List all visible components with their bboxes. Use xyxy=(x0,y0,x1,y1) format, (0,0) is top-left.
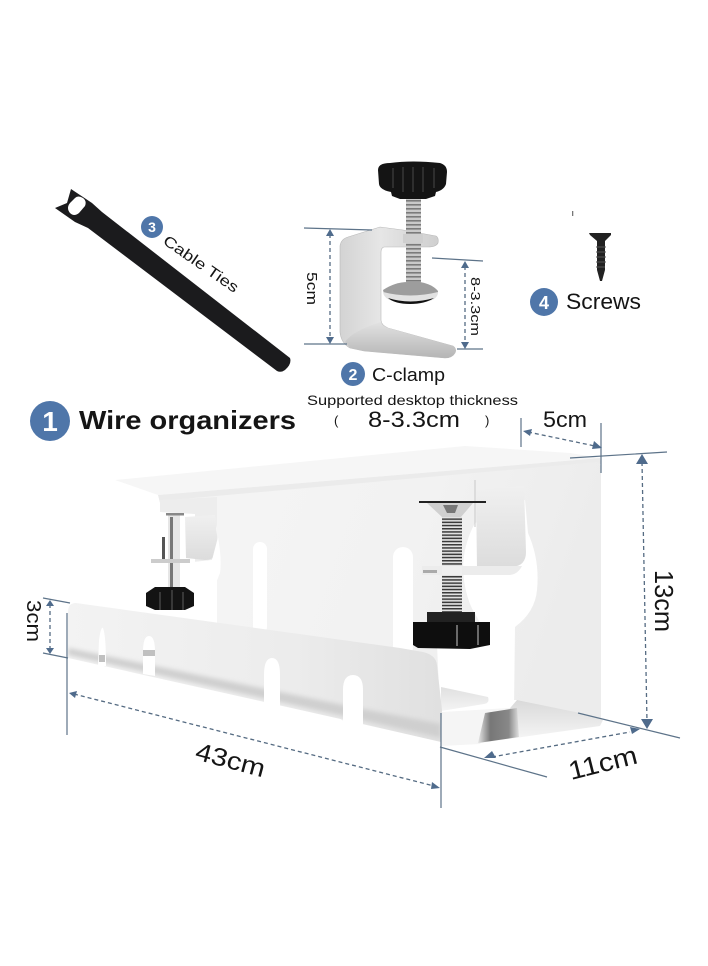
left clamp screw xyxy=(151,513,190,587)
main wire organizer xyxy=(68,446,603,746)
supported thickness text xyxy=(307,392,518,432)
badge 2 and C-clamp label: 2 xyxy=(349,367,358,384)
left black knob xyxy=(146,587,194,610)
dimension: 11cm depth xyxy=(440,727,640,786)
tick mark xyxy=(572,211,573,216)
bottom tray floor xyxy=(480,700,603,743)
clamp foot xyxy=(345,322,456,358)
threaded shaft xyxy=(406,196,421,286)
left clamp arm xyxy=(185,515,218,560)
clamp height dimension: 5cm: 5cm xyxy=(303,272,320,305)
badge 1 and Wire organizers heading: 1 xyxy=(42,406,58,437)
flange shadow band xyxy=(158,458,601,503)
dimension: 13cm height: 13cm xyxy=(649,570,679,632)
badge 4 and Screws label: Screws xyxy=(566,289,641,314)
dimension: 3cm lip height: 3cm xyxy=(22,600,44,642)
clamp cross plate xyxy=(422,566,522,575)
threaded collar xyxy=(403,234,423,243)
black knob xyxy=(378,162,447,199)
C-clamp illustration xyxy=(340,162,456,358)
right wrench cut-out xyxy=(437,500,538,712)
dimension: 11cm depth: 11cm xyxy=(565,740,640,786)
dimension: 43cm length: 43cm xyxy=(192,738,268,783)
badge 2 and C-clamp label: C-clamp xyxy=(372,365,445,385)
clamp body xyxy=(340,227,456,358)
badge 4 and Screws label: 4 xyxy=(539,293,549,313)
clamp opening dimension: 8-3.3cm: 8-3.3cm xyxy=(468,277,483,336)
dimension: 5cm width: 5cm xyxy=(543,407,587,432)
supported thickness text: Supported desktop thickness xyxy=(307,392,518,408)
supported thickness text: ) xyxy=(485,413,489,428)
back plate slot right xyxy=(393,547,413,657)
tray front section xyxy=(441,708,510,746)
icon: screw xyxy=(589,233,611,281)
label: Cable Ties: Cable Ties xyxy=(160,232,242,297)
dimension: 13cm height xyxy=(570,452,680,738)
swivel pad xyxy=(383,282,438,304)
badge 3 xyxy=(141,216,163,238)
top flange xyxy=(115,446,600,495)
clamp height dimension: 5cm xyxy=(303,228,372,344)
supported thickness text: ( xyxy=(334,413,339,428)
dimension: 3cm lip height xyxy=(22,598,70,658)
lip slots xyxy=(98,628,363,728)
supported thickness text: 8-3.3cm xyxy=(368,407,460,432)
badge 3: 3 xyxy=(148,219,156,235)
cable tie strap xyxy=(55,189,290,372)
left wrench cut-out xyxy=(193,537,221,625)
right screw xyxy=(419,501,486,612)
lip lower shade band xyxy=(68,648,441,738)
arm seam line xyxy=(474,480,476,527)
dimension: 5cm width xyxy=(521,407,602,473)
badge 4 and Screws label xyxy=(530,288,641,316)
back plate slot left xyxy=(253,542,267,634)
badge 1 and Wire organizers heading xyxy=(30,401,296,441)
lip slot shading xyxy=(99,650,155,662)
tray shadow xyxy=(478,708,519,743)
right clamp arm xyxy=(476,486,526,568)
inner fold band xyxy=(441,687,488,711)
back plate xyxy=(160,462,601,722)
badge 2 and C-clamp label xyxy=(341,362,445,386)
front lip xyxy=(68,603,442,742)
dimension: 43cm length xyxy=(67,613,441,808)
badge 1 and Wire organizers heading: Wire organizers xyxy=(79,405,296,435)
right black knob xyxy=(413,612,490,649)
clamp opening dimension: 8-3.3cm xyxy=(432,258,483,349)
left bracket xyxy=(160,497,217,562)
